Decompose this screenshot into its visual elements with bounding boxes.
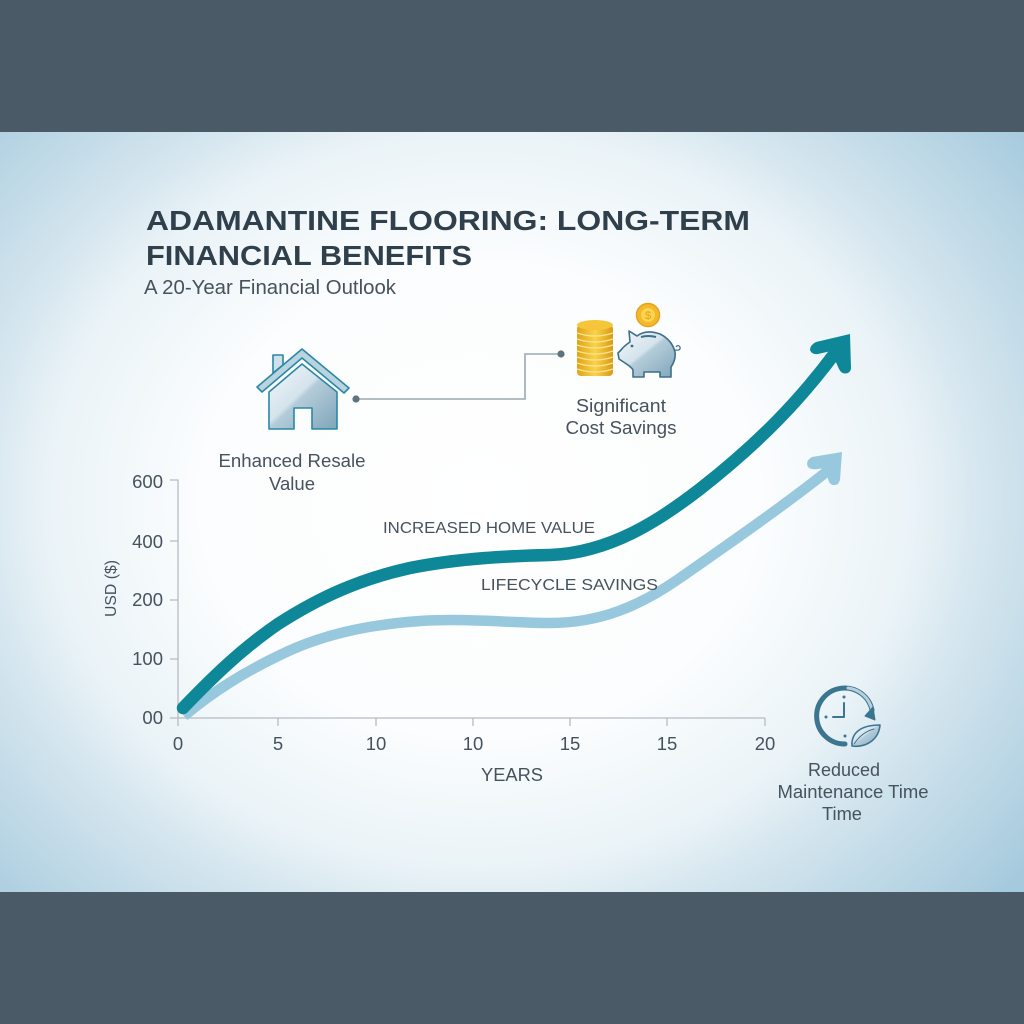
label: significant cost savings: Cost Savings bbox=[566, 418, 676, 438]
x axis title: YEARS bbox=[481, 765, 543, 785]
y axis title: USD ($) bbox=[103, 560, 120, 617]
x axis labels: 10 bbox=[463, 733, 483, 754]
chart: axes bbox=[170, 480, 765, 726]
label: enhanced resale value: Value bbox=[269, 474, 315, 494]
label: reduced maintenance time bbox=[778, 760, 928, 824]
icon: clock with leaf bbox=[817, 688, 880, 746]
y axis labels bbox=[132, 471, 163, 728]
title bbox=[146, 205, 750, 271]
icon: piggy bank bbox=[618, 331, 680, 377]
x axis labels: 15 bbox=[657, 733, 677, 754]
curve label: increased home value: INCREASED HOME VALUE bbox=[383, 520, 595, 537]
curve: increased home value bbox=[183, 334, 851, 708]
connector line bbox=[352, 350, 565, 403]
y axis labels: 200 bbox=[132, 589, 163, 610]
background panel bbox=[0, 132, 1024, 892]
label: significant cost savings: Significant bbox=[576, 396, 666, 416]
curve: lifecycle savings bbox=[184, 452, 842, 716]
x axis labels bbox=[173, 733, 775, 754]
label: reduced maintenance time: Maintenance Time bbox=[778, 782, 928, 802]
curve label: lifecycle savings: LIFECYCLE SAVINGS bbox=[481, 577, 658, 594]
x axis labels: 5 bbox=[273, 733, 283, 754]
x axis labels: 10 bbox=[366, 733, 386, 754]
icon: coin stack bbox=[577, 320, 613, 376]
bottom band bbox=[0, 892, 1024, 1024]
label: reduced maintenance time: Time bbox=[822, 804, 862, 824]
label: reduced maintenance time: Reduced bbox=[808, 760, 880, 780]
subtitle: A 20-Year Financial Outlook bbox=[144, 277, 397, 299]
y axis labels: 400 bbox=[132, 531, 163, 552]
top band bbox=[0, 0, 1024, 132]
label: enhanced resale value bbox=[218, 451, 366, 494]
y axis labels: 600 bbox=[132, 471, 163, 492]
x axis labels: 15 bbox=[560, 733, 580, 754]
icon: falling coin: $ bbox=[645, 310, 651, 322]
icon: falling coin bbox=[636, 304, 660, 326]
label: enhanced resale value: Enhanced Resale bbox=[218, 451, 366, 471]
x axis labels: 20 bbox=[755, 733, 775, 754]
x axis labels: 0 bbox=[173, 733, 183, 754]
icon: house bbox=[257, 349, 349, 429]
label: significant cost savings bbox=[566, 396, 676, 438]
title: ADAMANTINE FLOORING: LONG-TERM bbox=[146, 205, 750, 236]
y axis labels: 00 bbox=[142, 707, 163, 728]
y axis labels: 100 bbox=[132, 648, 163, 669]
title: FINANCIAL BENEFITS bbox=[146, 240, 472, 271]
